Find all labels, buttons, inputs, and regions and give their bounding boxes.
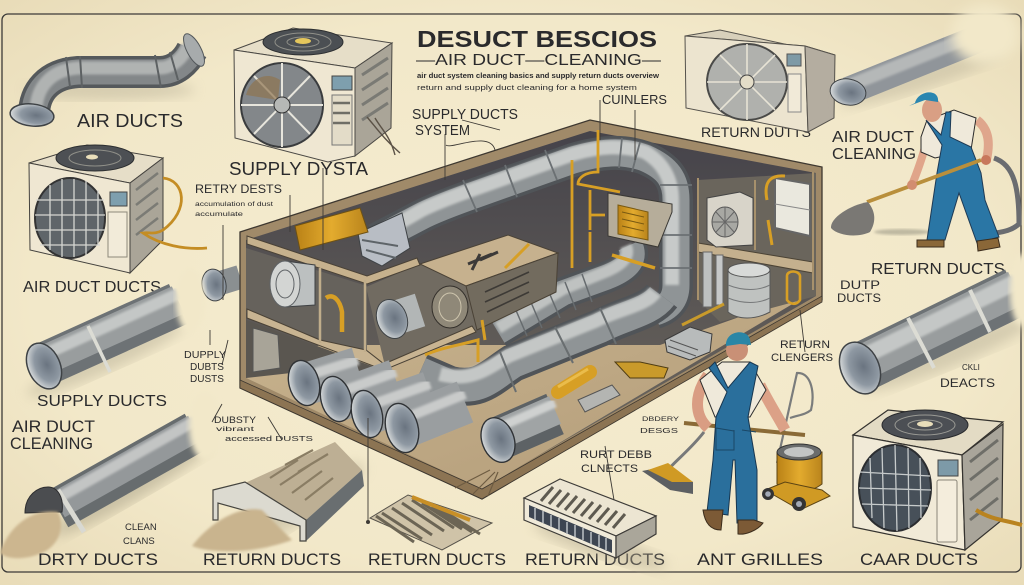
boots xyxy=(703,510,723,530)
label: air duct cleaning right: CLEANING xyxy=(832,146,916,163)
arms xyxy=(698,375,708,428)
label: dberry design: DBDERY xyxy=(642,416,680,423)
label: return ducts right: RETURN DUCTS xyxy=(871,261,1005,278)
label: dberry design xyxy=(640,416,680,435)
label: return ducts two: RETURN DUCTS xyxy=(368,551,506,569)
label: dupply ducts xyxy=(184,350,226,385)
label: clean clans: CLANS xyxy=(123,536,155,547)
label: dubsty: accessed DUSTS xyxy=(225,434,313,443)
tools on box xyxy=(468,252,498,270)
label: air duct cleaning left xyxy=(10,418,95,453)
panel: bottom-right air conditioner xyxy=(853,410,1022,550)
panel: left air conditioner xyxy=(29,145,207,273)
label: supply ducts system xyxy=(412,107,518,139)
label: clean clans xyxy=(123,522,157,547)
floor broom xyxy=(642,432,704,494)
panel: flat grille xyxy=(370,495,492,550)
panel: small side duct xyxy=(199,267,240,303)
label: retry dests: RETRY DESTS xyxy=(195,182,282,196)
label: dutp ducts: DUCTS xyxy=(837,293,881,305)
center box xyxy=(420,235,558,286)
box grille lines xyxy=(485,272,529,312)
callout lines xyxy=(210,100,805,524)
title: DESUCT BESCIOS xyxy=(417,26,657,52)
yellow roll on floor xyxy=(558,369,590,392)
center box front xyxy=(366,264,477,366)
yellow pipes top xyxy=(572,130,620,268)
label: supply ducts left: SUPPLY DUCTS xyxy=(37,393,167,410)
panel: top air conditioner xyxy=(234,28,400,162)
label: dutp ducts xyxy=(837,280,881,305)
label: supply ducts system: SYSTEM xyxy=(415,123,470,139)
label: dupply ducts: DUSTS xyxy=(190,374,224,385)
building shell xyxy=(240,120,822,499)
label: deacts: DEACTS xyxy=(940,378,995,390)
label: dubsty xyxy=(214,415,313,443)
label: air duct cleaning left: CLEANING xyxy=(10,435,93,453)
label: air duct cleaning right xyxy=(832,129,916,163)
overalls xyxy=(707,362,758,523)
front floor edge xyxy=(240,296,822,499)
panel: house cutaway xyxy=(240,120,822,499)
upper floor slab xyxy=(247,236,420,284)
upper room back xyxy=(246,248,367,355)
duct: large curved upper xyxy=(358,138,692,312)
label: rurt debris: CLNECTS xyxy=(581,463,638,475)
room: right utility wall xyxy=(682,172,816,325)
label: caar ducts: CAAR DUCTS xyxy=(860,551,978,569)
panel: worker with vacuum xyxy=(642,332,830,534)
shirt xyxy=(700,362,766,417)
duct: middle return xyxy=(498,245,632,336)
label: return cleaners xyxy=(771,339,833,364)
duct: front loose xyxy=(455,403,555,496)
label: ant grilles: ANT GRILLES xyxy=(697,551,823,569)
head xyxy=(922,98,942,122)
label: return cleaners: CLENGERS xyxy=(771,352,833,364)
overalls xyxy=(926,112,999,243)
label: dirty ducts: DRTY DUCTS xyxy=(38,551,158,569)
label: supply system: SUPPLY DYSTA xyxy=(229,159,368,179)
outlet duct xyxy=(395,310,420,318)
lower room back xyxy=(246,320,388,378)
hose xyxy=(990,158,1019,234)
label: air duct cleaning left: AIR DUCT xyxy=(12,418,95,436)
label: dberry design: DESGS xyxy=(640,426,678,435)
title small print: air duct system cleaning basics and supply return ducts overview xyxy=(417,71,659,80)
box fan xyxy=(432,286,468,328)
subtitle: —AIR DUCT—CLEANING— xyxy=(416,52,661,69)
broom xyxy=(831,160,981,235)
arms xyxy=(912,143,926,185)
hands xyxy=(981,155,991,165)
duct inlets group xyxy=(284,357,465,456)
shelf and lower rooms xyxy=(246,130,672,378)
panel: top-right air conditioner xyxy=(685,30,835,132)
label: dubsty: DUBSTY xyxy=(214,415,257,426)
panel: box grille xyxy=(524,479,670,578)
back wall xyxy=(246,131,816,488)
label: rurt debris: RURT DEBB xyxy=(580,449,652,461)
label: cuinlers: CUINLERS xyxy=(602,92,667,107)
pipe in lower room xyxy=(425,320,485,362)
boots xyxy=(917,238,1000,251)
label: air duct cleaning right: AIR DUCT xyxy=(832,129,915,146)
label: dutp ducts: DUTP xyxy=(840,280,880,292)
shirt xyxy=(921,110,976,158)
panel: worker with broom xyxy=(831,92,1019,251)
floor xyxy=(246,290,816,489)
label: deacts: CKLI xyxy=(962,363,980,372)
label: rurt debris xyxy=(580,449,652,475)
floor tools xyxy=(578,327,712,412)
panel: dirty rectangular duct xyxy=(192,442,372,558)
panel: top-right duct xyxy=(828,4,1019,116)
vacuum cleaner xyxy=(762,373,830,511)
yellow pipe in room xyxy=(326,296,342,332)
push pole xyxy=(684,423,805,435)
foil roll xyxy=(285,261,315,307)
duct: large lower main xyxy=(420,292,662,392)
label: return ducts top: RETURN DUTTS xyxy=(701,125,811,140)
control box xyxy=(608,193,672,247)
label: dubsty: vibrant xyxy=(216,426,254,433)
label: dupply ducts: DUPPLY xyxy=(184,350,226,361)
panel: dirty duct xyxy=(0,392,221,558)
label: air duct ducts: AIR DUCT DUCTS xyxy=(23,279,161,296)
panel: mid-right duct xyxy=(832,254,1024,402)
partition walls xyxy=(320,268,365,352)
panel: left supply duct xyxy=(20,268,204,406)
label: air ducts: AIR DUCTS xyxy=(77,111,183,131)
label: clean clans: CLEAN xyxy=(125,522,157,533)
label: retry dests xyxy=(195,182,282,218)
panel: title block xyxy=(416,26,661,92)
lower shelf xyxy=(247,309,476,370)
label: return ducts three: RETURN DUCTS xyxy=(525,551,665,569)
label: retry dests: accumulate xyxy=(195,211,244,218)
label: supply ducts system: SUPPLY DUCTS xyxy=(412,107,518,123)
yellow insulation xyxy=(295,208,368,250)
label: dupply ducts: DUBTS xyxy=(190,362,224,373)
panel: top-left elbow duct xyxy=(9,31,209,128)
label: return cleaners: RETURN xyxy=(780,339,830,351)
label: deacts xyxy=(940,363,995,390)
head xyxy=(726,339,748,361)
lower room panel xyxy=(253,328,280,372)
title small print line two: return and supply duct cleaning for a home system xyxy=(417,83,637,92)
label: retry dests: accumulation of dust xyxy=(195,201,273,208)
label: return ducts one: RETURN DUCTS xyxy=(203,551,341,569)
